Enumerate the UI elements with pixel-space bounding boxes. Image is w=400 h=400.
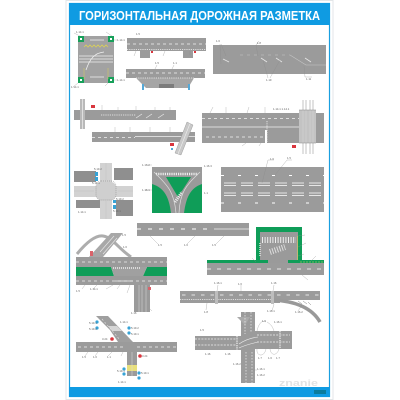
panel: crossroads with turn lanes: 1.6	[268, 356, 272, 360]
panel: crossroads with turn lanes: 1.16.1	[257, 367, 265, 371]
panel: junction with sign icons and yellow box: 1.1	[107, 355, 111, 359]
panel: crossing with green corners: 1.14.1	[117, 38, 125, 42]
panel: junction with ramps and green median: 1.5	[122, 233, 126, 237]
panel: junction with sign icons and yellow box: 5.19.1	[131, 332, 139, 336]
panel: wide road with arrows: 1.8	[257, 41, 261, 45]
panel: junction with ramps and green median: 1.6	[123, 245, 127, 249]
panel: road with curving exit ramp: 1.6	[238, 282, 242, 286]
panel: crossroads with turn lanes: 1.16	[205, 352, 211, 356]
panel: crossroads with turn lanes: 1.5	[200, 328, 204, 332]
panel: intersection with pedestrian crossings: 1.14.1	[78, 210, 86, 214]
panel: intersection with pedestrian crossings: 5.19.2	[94, 167, 102, 171]
panel: road with transition to solid line: 1.6	[184, 243, 188, 247]
panel: road with curving exit ramp: 1.8	[204, 310, 208, 314]
panel: junction with sign icons and yellow box: 1.14.1	[118, 380, 126, 384]
panel: junction with sign icons and yellow box	[76, 316, 177, 384]
panel: crossroads with turn lanes: 1.16.1	[274, 320, 282, 324]
panel: junction with sign icons and yellow box: 5.19.1	[89, 321, 97, 325]
watermark: znanie	[279, 378, 318, 388]
panel: crossroads with turn lanes: 1.16.2	[257, 373, 265, 377]
panel: crossroads with turn lanes: 1.16.2	[233, 362, 241, 366]
panel: junction with sign icons and yellow box: 1.14.1	[120, 320, 128, 324]
panel: Y junction with green islands	[142, 163, 212, 213]
panel: crossroads with turn lanes	[195, 312, 292, 383]
panel: crossing with green corners: 1.14.1	[76, 30, 84, 34]
panel: road with crossing and pedestrian marks	[74, 99, 176, 129]
panel: junction with ramps and green median: 1.16	[131, 311, 137, 315]
panel: road with curving exit ramp: 1.16	[271, 281, 277, 285]
panel: wide road with arrows: 1.11	[306, 77, 312, 81]
panel: junction with sign icons and yellow box: 3.24	[102, 337, 108, 341]
panel: wide road with arrows: 1.19	[266, 78, 272, 82]
panel: junction with sign icons and yellow box: 5.19.2	[131, 326, 139, 330]
panel: road with transition to solid line: 1.5	[158, 243, 162, 247]
panel: crossing with green corners: 1.14.1	[71, 85, 79, 89]
panel: junction with sign icons and yellow box: 5.19.1	[117, 369, 125, 373]
panel: Y junction with green islands: 1.16.3	[204, 164, 212, 168]
panel: multi-lane road markings: 1.6	[270, 157, 274, 161]
title: ГОРИЗОНТАЛЬНАЯ ДОРОЖНАЯ РАЗМЕТКА	[79, 9, 320, 23]
title band	[69, 3, 330, 25]
publisher logo	[314, 390, 326, 394]
panel: junction with ramps and green median	[76, 233, 167, 315]
blue poster frame	[70, 4, 330, 396]
panel: road with side stubs: 1.5	[136, 32, 140, 36]
panel: dual carriageway with railway crossing	[202, 100, 324, 154]
panel: junction with sign icons and yellow box: 5.19.1	[141, 371, 149, 375]
panel: road with bus bay: 1.1	[173, 61, 177, 65]
panel: road with curving exit ramp: 1.16.1	[214, 281, 222, 285]
panel: crossing with green corners	[71, 30, 125, 89]
panel: road with transition to solid line	[137, 223, 249, 247]
panel: road with diagonal side street	[92, 122, 195, 155]
panel: wide road with arrows	[213, 39, 326, 82]
panel: crossroads with turn lanes: 1.5	[262, 319, 266, 323]
panel: multi-lane road markings: 1.5	[287, 156, 291, 160]
panel: junction with sign icons and yellow box: 1.5	[82, 355, 86, 359]
poster sheet	[66, 0, 333, 400]
panel: junction with sign icons and yellow box: 1.6	[93, 355, 97, 359]
panel: intersection with pedestrian crossings	[74, 163, 133, 219]
bottom blue band	[69, 387, 330, 397]
panel: T junction with green median	[207, 227, 324, 280]
panel: Y junction with green islands: 1.1	[204, 191, 208, 195]
panel: road with transition to solid line: 1.5	[212, 243, 216, 247]
panel: junction with ramps and green median: 1.5	[76, 289, 80, 293]
panel: multi-lane road markings	[221, 156, 324, 212]
panel: road with curving exit ramp: 1.16.1	[267, 309, 275, 313]
panel: junction with sign icons and yellow box: 5.19.2	[89, 327, 97, 331]
panel: wide road with arrows: 1.6	[216, 39, 220, 43]
panel: junction with ramps and green median: 1.14.1	[90, 287, 98, 291]
panel: road with bus bay	[126, 61, 205, 90]
panel: Y junction with green islands: 1.16.2	[142, 163, 150, 167]
panel: road with curving exit ramp: 1.16.2	[295, 310, 303, 314]
panel: crossroads with turn lanes: 1.16	[225, 352, 231, 356]
panel: intersection with pedestrian crossings: 5.19.2	[116, 197, 124, 201]
panel: crossing with green corners: 1.14.1	[117, 78, 125, 82]
panel: crossroads with turn lanes: 1.7	[258, 356, 262, 360]
panel: road with curving exit ramp	[180, 281, 320, 322]
panel: junction with sign icons and yellow box: 3.24	[142, 354, 148, 358]
panel: road with side stubs	[127, 32, 206, 58]
panel: crossroads with turn lanes: 1.7	[276, 356, 280, 360]
panel: dual carriageway with railway crossing: 1.14.1 1.14.1	[273, 107, 290, 111]
panel: Y junction with green islands: 1.16.1	[142, 188, 150, 192]
panel: intersection with pedestrian crossings: 5.19.1	[92, 181, 100, 185]
panel: road with bus bay: 1.5	[155, 61, 159, 65]
panel: intersection with pedestrian crossings: 5.19.1	[113, 209, 121, 213]
